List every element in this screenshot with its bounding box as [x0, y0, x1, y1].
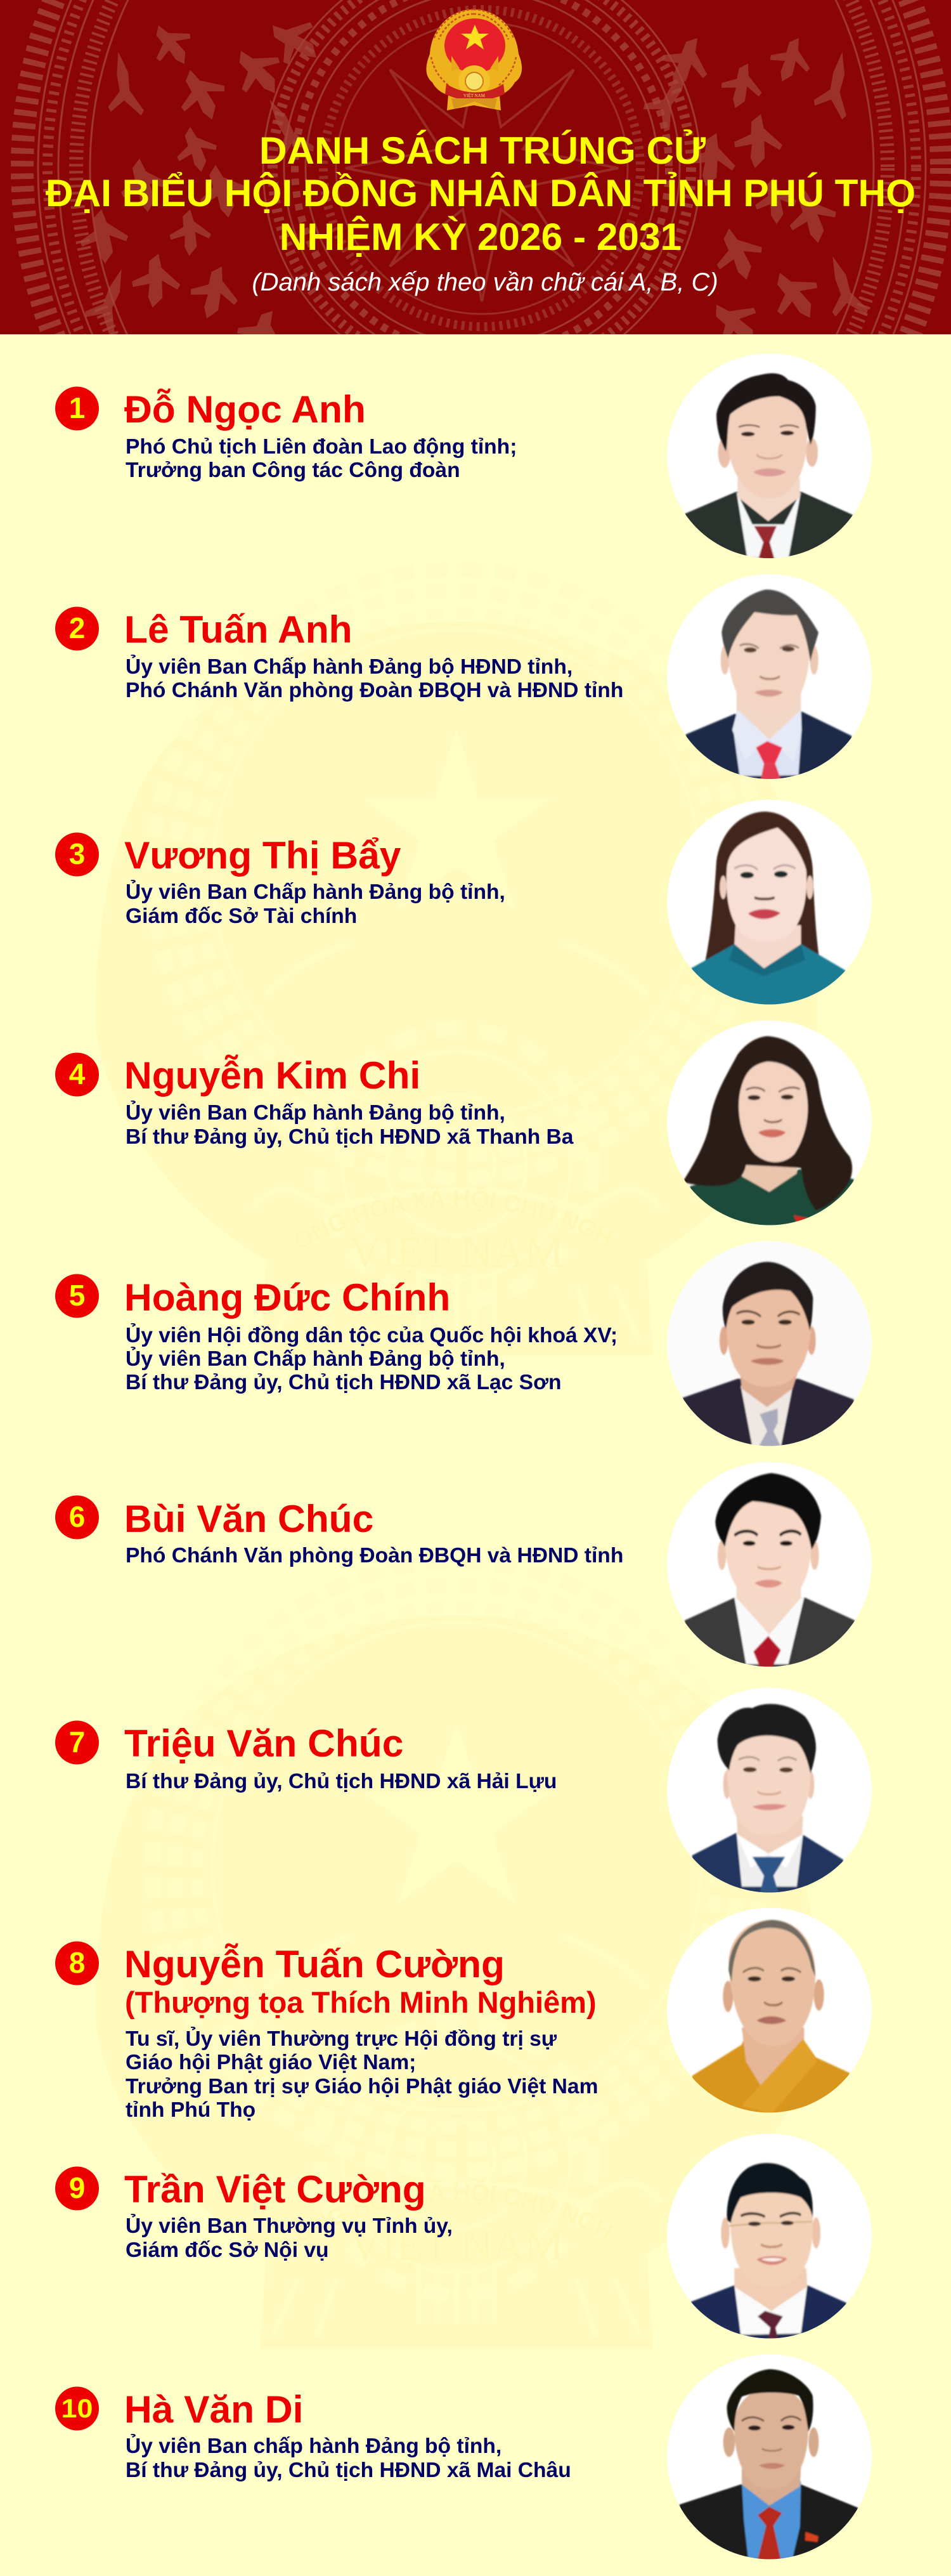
role 8: [126, 2027, 598, 2122]
portrait 1: [667, 353, 872, 560]
name 8: [124, 1942, 597, 2019]
role 3: Ủy viên Ban Chấp hành Đảng bộ tỉnh,: [126, 880, 505, 904]
name 5: Hoàng Đức Chính: [124, 1276, 450, 1319]
number badge 8: [55, 1941, 99, 1985]
number badge 4: [55, 1053, 99, 1096]
role 4: Bí thư Đảng ủy, Chủ tịch HĐND xã Thanh Ba: [126, 1125, 574, 1149]
number badge 9: 9: [69, 2171, 85, 2204]
panel: candidate 3: [55, 799, 872, 1007]
portrait 9: [667, 2134, 872, 2339]
role 8: Trưởng Ban trị sự Giáo hội Phật giáo Việt Nam: [126, 2075, 598, 2098]
role 5: Ủy viên Hội đồng dân tộc của Quốc hội khoá XV;: [126, 1323, 618, 1347]
role 2: Ủy viên Ban Chấp hành Đảng bộ HĐND tỉnh,: [126, 655, 573, 679]
number badge 4: 4: [69, 1057, 86, 1090]
panel: candidate 4: [55, 1020, 872, 1226]
watermark: upper national emblem: VIỆT NAM: [349, 1228, 564, 1277]
role 7: Bí thư Đảng ủy, Chủ tịch HĐND xã Hải Lựu: [126, 1770, 557, 1793]
watermark: upper national emblem: CỘNG HÒA XÃ HỘI CHỦ NGHĨA: [298, 1187, 611, 1250]
portrait 8: [667, 1908, 872, 2114]
role 10: Ủy viên Ban chấp hành Đảng bộ tỉnh,: [126, 2434, 501, 2458]
number badge 7: [55, 1720, 99, 1765]
bronze drum pattern: [11, 0, 951, 334]
number badge 10: [55, 2386, 99, 2431]
panel: candidate 9: [55, 2134, 872, 2339]
name 3: Vương Thị Bẩy: [124, 834, 401, 877]
number badge 7: 7: [69, 1725, 85, 1758]
number badge 9: [55, 2167, 99, 2210]
panel: candidate 7: [55, 1687, 872, 1895]
watermark: lower national emblem: VIỆT NAM: [349, 2221, 564, 2270]
drum bird motifs: [81, 22, 868, 334]
portrait 3: [667, 799, 872, 1007]
number badge 5: 5: [69, 1279, 85, 1312]
number badge 2: [55, 606, 99, 651]
number badge 6: 6: [69, 1500, 85, 1533]
number badge 3: 3: [69, 837, 85, 870]
role 2: [126, 655, 623, 702]
name 6: Bùi Văn Chúc: [124, 1497, 373, 1540]
role 2: Phó Chánh Văn phòng Đoàn ĐBQH và HĐND tỉnh: [126, 679, 623, 702]
portrait 6: [667, 1461, 872, 1668]
portrait 2: [667, 574, 872, 783]
role 9: Ủy viên Ban Thường vụ Tỉnh ủy,: [126, 2214, 453, 2238]
number badge 1: 1: [69, 391, 85, 424]
panel: candidate 10: [55, 2355, 872, 2561]
panel: candidate 1: [55, 353, 872, 560]
name 4: Nguyễn Kim Chi: [124, 1054, 420, 1097]
panel: candidate 2: [55, 574, 872, 783]
portrait 10: [667, 2355, 872, 2561]
number badge 6: [55, 1496, 99, 1539]
watermark: lower national emblem: CỘNG HÒA XÃ HỘI CHỦ NGHĨA: [298, 2181, 611, 2244]
number badge 3: [55, 832, 99, 877]
name 9: Trần Việt Cường: [124, 2167, 426, 2211]
watermark: lower national emblem: [95, 1615, 812, 2349]
name 2: Lê Tuấn Anh: [124, 608, 353, 651]
role 8: Giáo hội Phật giáo Việt Nam;: [126, 2051, 416, 2074]
role 1: [126, 435, 517, 482]
number badge 1: [55, 387, 99, 430]
role 3: [126, 880, 505, 928]
title: DANH SÁCH TRÚNG CỬ: [259, 129, 706, 172]
role 10: Bí thư Đảng ủy, Chủ tịch HĐND xã Mai Châu: [126, 2459, 571, 2482]
role 8: Tu sĩ, Ủy viên Thường trực Hội đồng trị sự: [126, 2027, 557, 2051]
title: ĐẠI BIỂU HỘI ĐỒNG NHÂN DÂN TỈNH PHÚ THỌ: [46, 171, 915, 214]
role 5: [126, 1323, 618, 1394]
role 1: Trưởng ban Công tác Công đoàn: [126, 459, 460, 482]
portrait 7: [667, 1687, 872, 1895]
role 10: [126, 2434, 571, 2482]
role 9: Giám đốc Sở Nội vụ: [126, 2239, 329, 2262]
portrait 5: [667, 1241, 872, 1448]
portrait 4: [667, 1020, 872, 1226]
title: NHIỆM KỲ 2026 - 2031: [280, 215, 682, 258]
number badge 5: [55, 1274, 99, 1318]
panel: candidate 6: [55, 1461, 872, 1668]
watermark: upper national emblem: [95, 622, 818, 1356]
role 3: Giám đốc Sở Tài chính: [126, 905, 357, 928]
role 8: tỉnh Phú Thọ: [126, 2098, 256, 2122]
panel: header banner: [0, 0, 951, 334]
number badge 8: 8: [69, 1946, 85, 1979]
icon: national emblem: [426, 10, 522, 110]
title: [46, 129, 915, 258]
number badge 10: 10: [61, 2393, 93, 2423]
name 10: Hà Văn Di: [124, 2388, 303, 2431]
name 7: Triệu Văn Chúc: [124, 1722, 403, 1765]
name 8: (Thượng tọa Thích Minh Nghiêm): [125, 1985, 597, 2019]
role 4: [126, 1101, 574, 1149]
icon: national emblem: VIỆT NAM: [463, 93, 486, 98]
role 5: Bí thư Đảng ủy, Chủ tịch HĐND xã Lạc Sơn: [126, 1371, 561, 1394]
name 8: Nguyễn Tuấn Cường: [124, 1942, 505, 1985]
role 9: [126, 2214, 453, 2262]
role 5: Ủy viên Ban Chấp hành Đảng bộ tỉnh,: [126, 1347, 505, 1371]
role 6: Phó Chánh Văn phòng Đoàn ĐBQH và HĐND tỉnh: [126, 1544, 623, 1567]
name 1: Đỗ Ngọc Anh: [124, 388, 366, 431]
role 4: Ủy viên Ban Chấp hành Đảng bộ tỉnh,: [126, 1101, 505, 1125]
panel: candidate 8: [55, 1908, 872, 2122]
number badge 2: 2: [69, 611, 85, 644]
role 1: Phó Chủ tịch Liên đoàn Lao động tỉnh;: [126, 435, 517, 459]
subtitle: (Danh sách xếp theo vần chữ cái A, B, C): [252, 268, 718, 296]
panel: candidate 5: [55, 1241, 872, 1448]
